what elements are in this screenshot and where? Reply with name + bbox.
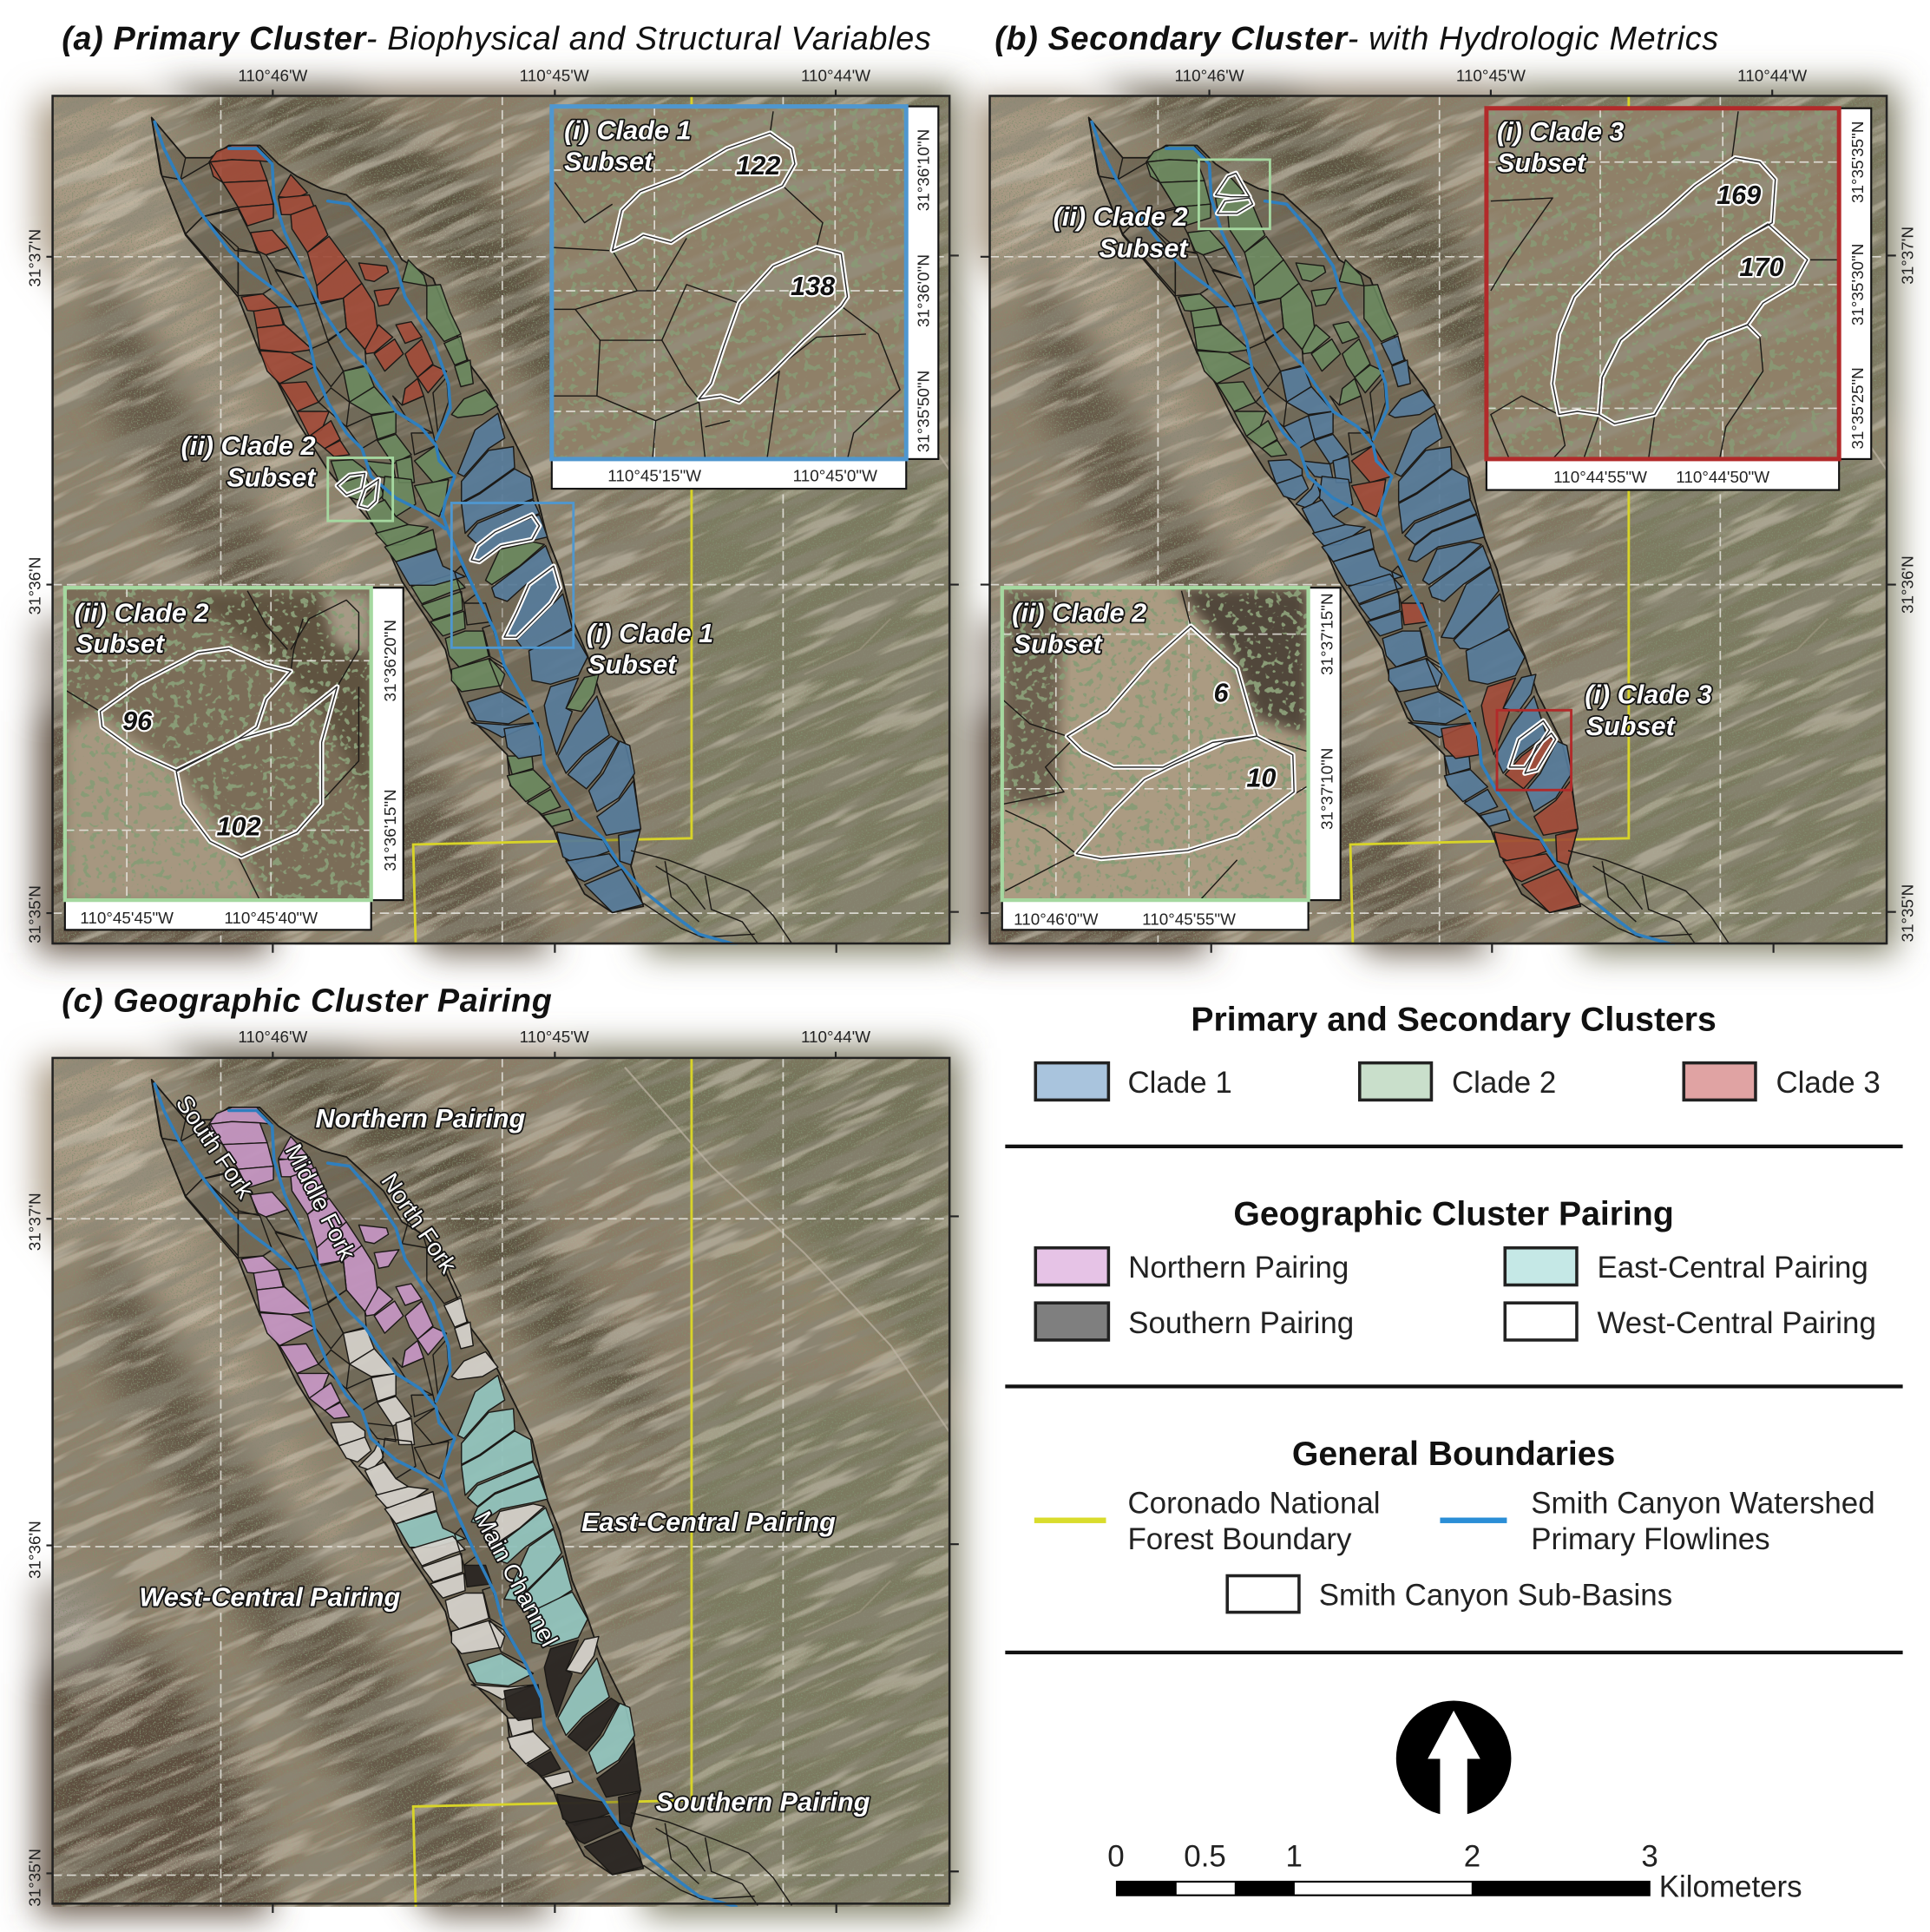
- axis ticks and labels b: 31°37'N: [1900, 227, 1918, 285]
- inset i clade 1: 110°45'0"W: [793, 468, 877, 486]
- legend: primary and secondary clusters: Clade 1: [1127, 1066, 1232, 1100]
- legend: geographic cluster pairing: Geographic Cluster Pairing: [1233, 1195, 1674, 1232]
- axis ticks and labels a: 110°46'W: [238, 67, 308, 85]
- legend: geographic cluster pairing: Southern Pairing: [1128, 1306, 1354, 1340]
- inset i clade 3: 31°35'25"N: [1849, 367, 1868, 450]
- inset ii clade 2: 31°36'20"N: [382, 620, 400, 702]
- axis ticks and labels b: 110°44'W: [1737, 67, 1807, 85]
- legend: general boundaries: Smith Canyon Sub-Basins: [1319, 1579, 1672, 1613]
- axis ticks and labels c: [26, 1028, 959, 1913]
- forest boundary c: [413, 1058, 692, 1907]
- map base b: [949, 57, 1923, 982]
- title c: (c) Geographic Cluster Pairing: [62, 982, 552, 1019]
- terrain a: [0, 0, 1507, 1393]
- icon: north arrow: [1396, 1701, 1511, 1817]
- axis ticks and labels b: 31°35'N: [1900, 884, 1918, 942]
- fork and channel labels c: [171, 1090, 563, 1651]
- inset ii clade 2 b: 31°37'10"N: [1318, 748, 1336, 830]
- legend: geographic cluster pairing: West-Central Pairing: [1597, 1306, 1876, 1340]
- inset i clade 1: 31°35'50"N: [916, 371, 934, 452]
- panel a: primary cluster map: [7, 26, 986, 982]
- inset i clade 1: 122: [736, 151, 780, 181]
- pairing labels c: Southern Pairing: [656, 1787, 870, 1817]
- inset i clade 1: [549, 104, 939, 490]
- fork and channel labels c: South Fork: [171, 1090, 259, 1203]
- legend: general boundaries: Forest Boundary: [1127, 1522, 1352, 1556]
- extent box green a: [328, 457, 393, 521]
- scale bar: 2: [1464, 1840, 1480, 1874]
- forest boundary a: [413, 95, 692, 944]
- terrain b: [584, 0, 1930, 1393]
- axis ticks and labels c: 31°37'N: [26, 1193, 44, 1251]
- axis ticks and labels c: 110°46'W: [238, 1028, 308, 1047]
- legend: primary and secondary clusters: [1035, 1002, 1881, 1100]
- inset ii clade 2 b: (ii) Clade 2: [1012, 598, 1146, 628]
- highlighted basins on main map a: [337, 473, 560, 637]
- inset ii clade 2 b: 6: [1214, 678, 1230, 707]
- axis ticks and labels c: 31°35'N: [26, 1849, 44, 1907]
- inset ii clade 2: [65, 588, 404, 930]
- legend: geographic cluster pairing: [1035, 1195, 1876, 1340]
- sub-basins a: [152, 117, 791, 943]
- callout ii clade 2 subset a: Subset: [226, 463, 317, 492]
- pairing labels c: West-Central Pairing: [139, 1582, 400, 1612]
- coordinate grid b: [990, 95, 1887, 944]
- inset ii clade 2: (ii) Clade 2: [75, 598, 208, 628]
- forest boundary b: [1350, 95, 1629, 944]
- inset ii clade 2 b: 110°45'55"W: [1142, 911, 1236, 930]
- axis ticks and labels a: 110°45'W: [520, 67, 589, 85]
- axis ticks and labels a: 31°36'N: [26, 557, 44, 614]
- scale bar: 3: [1641, 1840, 1658, 1874]
- axis ticks and labels a: 31°37'N: [26, 229, 44, 287]
- callout i clade 3 subset b: (i) Clade 3: [1585, 680, 1712, 709]
- legend: general boundaries: Coronado National: [1127, 1487, 1381, 1521]
- inset ii clade 2 b: 110°46'0"W: [1014, 911, 1099, 930]
- callout i clade 3 subset b: [1585, 680, 1712, 741]
- fork and channel labels c: North Fork: [376, 1168, 463, 1278]
- panel c: geographic cluster pairing map: [0, 621, 1507, 1932]
- inset i clade 1: Subset: [564, 148, 654, 177]
- panel b: secondary cluster map: [584, 0, 1930, 1491]
- inset i clade 1: 31°36'0"N: [916, 254, 934, 327]
- inset i clade 1: 110°45'15"W: [607, 468, 701, 486]
- axis ticks and labels a: [26, 67, 959, 953]
- flowlines c: [154, 1084, 736, 1907]
- inset i clade 3: (i) Clade 3: [1497, 117, 1624, 147]
- inset ii clade 2: 31°36'15"N: [382, 789, 400, 871]
- axis ticks and labels c: 110°45'W: [520, 1028, 589, 1047]
- callout ii clade 2 subset b: (ii) Clade 2: [1054, 202, 1188, 232]
- title b: (b) Secondary Cluster- with Hydrologic Metrics: [995, 21, 1718, 57]
- inset i clade 3: 31°35'30"N: [1849, 244, 1868, 325]
- sub-basins c: [152, 1080, 791, 1905]
- title a: (a) Primary Cluster- Biophysical and Structural Variables: [62, 21, 931, 57]
- coordinate grid a: [53, 95, 949, 944]
- inset i clade 3: 110°44'55"W: [1553, 469, 1647, 487]
- legend: geographic cluster pairing: Northern Pairing: [1128, 1251, 1349, 1285]
- extent box red b: [1497, 710, 1572, 790]
- legend: geographic cluster pairing: East-Central Pairing: [1597, 1251, 1868, 1285]
- legend: general boundaries: General Boundaries: [1292, 1436, 1615, 1473]
- inset ii clade 2: 96: [122, 706, 153, 736]
- inset i clade 3: 170: [1739, 253, 1784, 282]
- callout i clade 1 subset a: (i) Clade 1: [587, 619, 713, 648]
- scale bar: Kilometers: [1659, 1870, 1802, 1903]
- axis ticks and labels b: [981, 67, 1918, 953]
- map frame c: [53, 1058, 949, 1903]
- callout ii clade 2 subset a: (ii) Clade 2: [181, 431, 316, 461]
- scale bar: 0: [1107, 1840, 1125, 1874]
- axis ticks and labels b: 110°46'W: [1175, 67, 1244, 85]
- fork and channel labels c: Middle Fork: [280, 1140, 361, 1265]
- inset i clade 3: 31°35'35"N: [1849, 122, 1868, 203]
- highlighted basins on main map b: [1216, 174, 1556, 773]
- inset i clade 3: Subset: [1497, 148, 1587, 178]
- legend: general boundaries: Primary Flowlines: [1531, 1522, 1770, 1556]
- legend: general boundaries: Smith Canyon Watershed: [1531, 1487, 1875, 1521]
- axis ticks and labels c: 110°44'W: [801, 1028, 870, 1047]
- legend panel: [1005, 1002, 1903, 1903]
- callout ii clade 2 subset b: Subset: [1099, 234, 1189, 264]
- map frame a: [53, 95, 949, 943]
- inset ii clade 2: Subset: [75, 629, 166, 659]
- axis ticks and labels c: 31°36'N: [26, 1521, 44, 1579]
- coordinate grid c: [53, 1058, 949, 1907]
- map base c: [0, 621, 1507, 1932]
- callout i clade 3 subset b: Subset: [1586, 712, 1677, 741]
- inset ii clade 2: 110°45'45"W: [80, 910, 174, 928]
- callout i clade 1 subset a: Subset: [588, 650, 678, 680]
- legend: primary and secondary clusters: Primary and Secondary Clusters: [1191, 1002, 1717, 1039]
- legend: primary and secondary clusters: Clade 3: [1776, 1066, 1881, 1100]
- callout ii clade 2 subset b: [1054, 202, 1189, 264]
- inset i clade 3: 110°44'50"W: [1676, 469, 1769, 487]
- scale bar: [1107, 1840, 1802, 1903]
- scale bar: 1: [1285, 1840, 1303, 1874]
- inset ii clade 2 b: [1002, 588, 1341, 930]
- inset ii clade 2: 110°45'40"W: [224, 910, 318, 928]
- axis ticks and labels b: 31°36'N: [1900, 555, 1918, 614]
- fork and channel labels c: Main Channel: [469, 1507, 563, 1651]
- pairing labels c: [139, 1104, 870, 1817]
- scale bar: 0.5: [1184, 1840, 1226, 1874]
- callout i clade 1 subset a: [587, 619, 713, 680]
- extent box blue a: [451, 503, 574, 647]
- inset i clade 1: 31°36'10"N: [916, 129, 934, 211]
- inset ii clade 2: 102: [216, 812, 261, 841]
- inset ii clade 2 b: 10: [1246, 764, 1276, 793]
- inset ii clade 2 b: Subset: [1014, 630, 1104, 660]
- pairing labels c: Northern Pairing: [316, 1104, 526, 1134]
- legend: general boundaries: [1034, 1436, 1875, 1613]
- pairing labels c: East-Central Pairing: [581, 1508, 836, 1537]
- axis ticks and labels a: 31°35'N: [26, 885, 44, 943]
- axis ticks and labels a: 110°44'W: [801, 67, 870, 85]
- inset i clade 1: (i) Clade 1: [564, 115, 692, 145]
- inset i clade 3: [1484, 106, 1873, 491]
- terrain c: [0, 621, 1507, 1932]
- flowlines b: [1092, 122, 1673, 944]
- extent box green b: [1198, 160, 1270, 229]
- axis ticks and labels b: 110°45'W: [1456, 67, 1526, 85]
- sub-basins b: [1089, 117, 1729, 943]
- inset ii clade 2 b: 31°37'15"N: [1318, 593, 1336, 675]
- inset i clade 3: 169: [1717, 181, 1761, 210]
- callout ii clade 2 subset a: [181, 431, 317, 492]
- legend: primary and secondary clusters: Clade 2: [1452, 1066, 1556, 1100]
- map frame b: [990, 95, 1887, 943]
- flowlines a: [154, 122, 736, 944]
- inset i clade 1: 138: [791, 272, 835, 301]
